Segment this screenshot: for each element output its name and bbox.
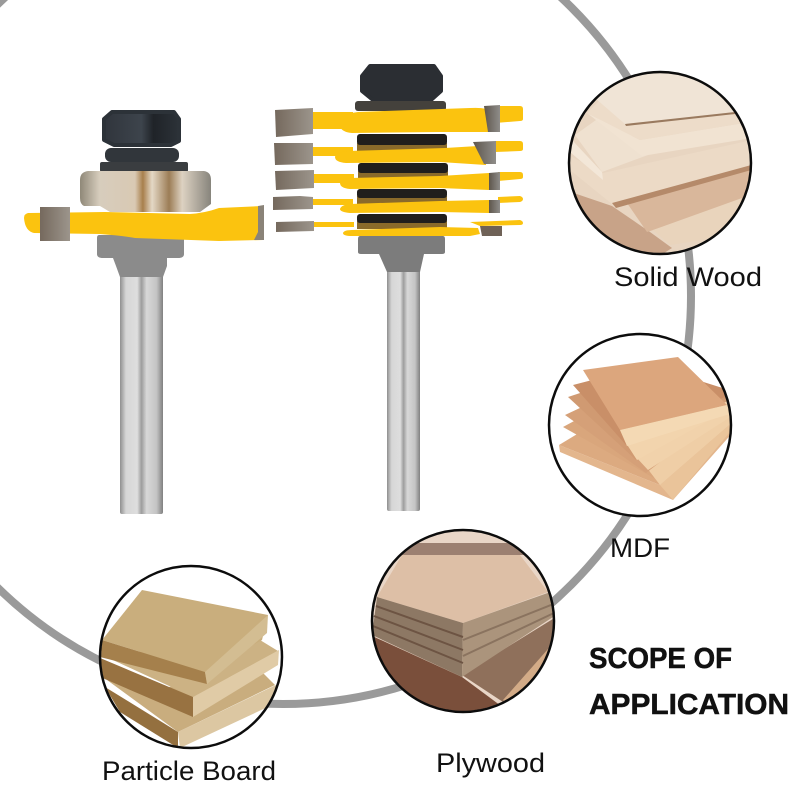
washer — [355, 101, 446, 111]
router bit: finger joint stack — [273, 66, 523, 511]
label: particle board: Particle Board — [102, 756, 276, 786]
label: solid wood: Solid Wood — [614, 262, 762, 292]
left carbide tip — [40, 207, 70, 241]
label: MDF: MDF — [610, 533, 670, 563]
material circle: particle board — [100, 566, 282, 748]
cutter plate 5 — [276, 220, 523, 236]
heading: scope of application — [589, 643, 789, 721]
heading: scope of application: APPLICATION — [589, 689, 789, 721]
label: plywood: Plywood — [436, 748, 545, 778]
heading: scope of application: SCOPE OF — [589, 643, 732, 675]
hex nut — [104, 112, 179, 145]
router bit: single tongue cutter — [24, 112, 264, 514]
chipboard stack — [100, 590, 279, 748]
board stack — [571, 73, 750, 253]
cutter plate 4 — [273, 196, 523, 213]
material circle: solid wood — [565, 68, 755, 262]
hub and neck — [358, 236, 445, 272]
plywood sheets — [370, 543, 556, 720]
cutter plate 2 — [274, 141, 523, 165]
hub and neck — [97, 235, 184, 277]
bearing — [80, 171, 211, 212]
stacked sheets — [559, 357, 735, 500]
black spacers — [357, 134, 448, 229]
right carbide tip — [254, 205, 264, 240]
hex nut — [362, 66, 441, 100]
cutter plate 3 — [275, 170, 523, 190]
material circle: plywood — [370, 530, 556, 720]
shank — [120, 272, 163, 514]
material circle: MDF — [549, 334, 735, 516]
connecting gray arc — [0, 0, 691, 704]
cutter plate 1 — [275, 105, 523, 137]
washers — [105, 148, 179, 162]
yellow cutter plate — [24, 206, 263, 241]
shank — [387, 268, 420, 511]
